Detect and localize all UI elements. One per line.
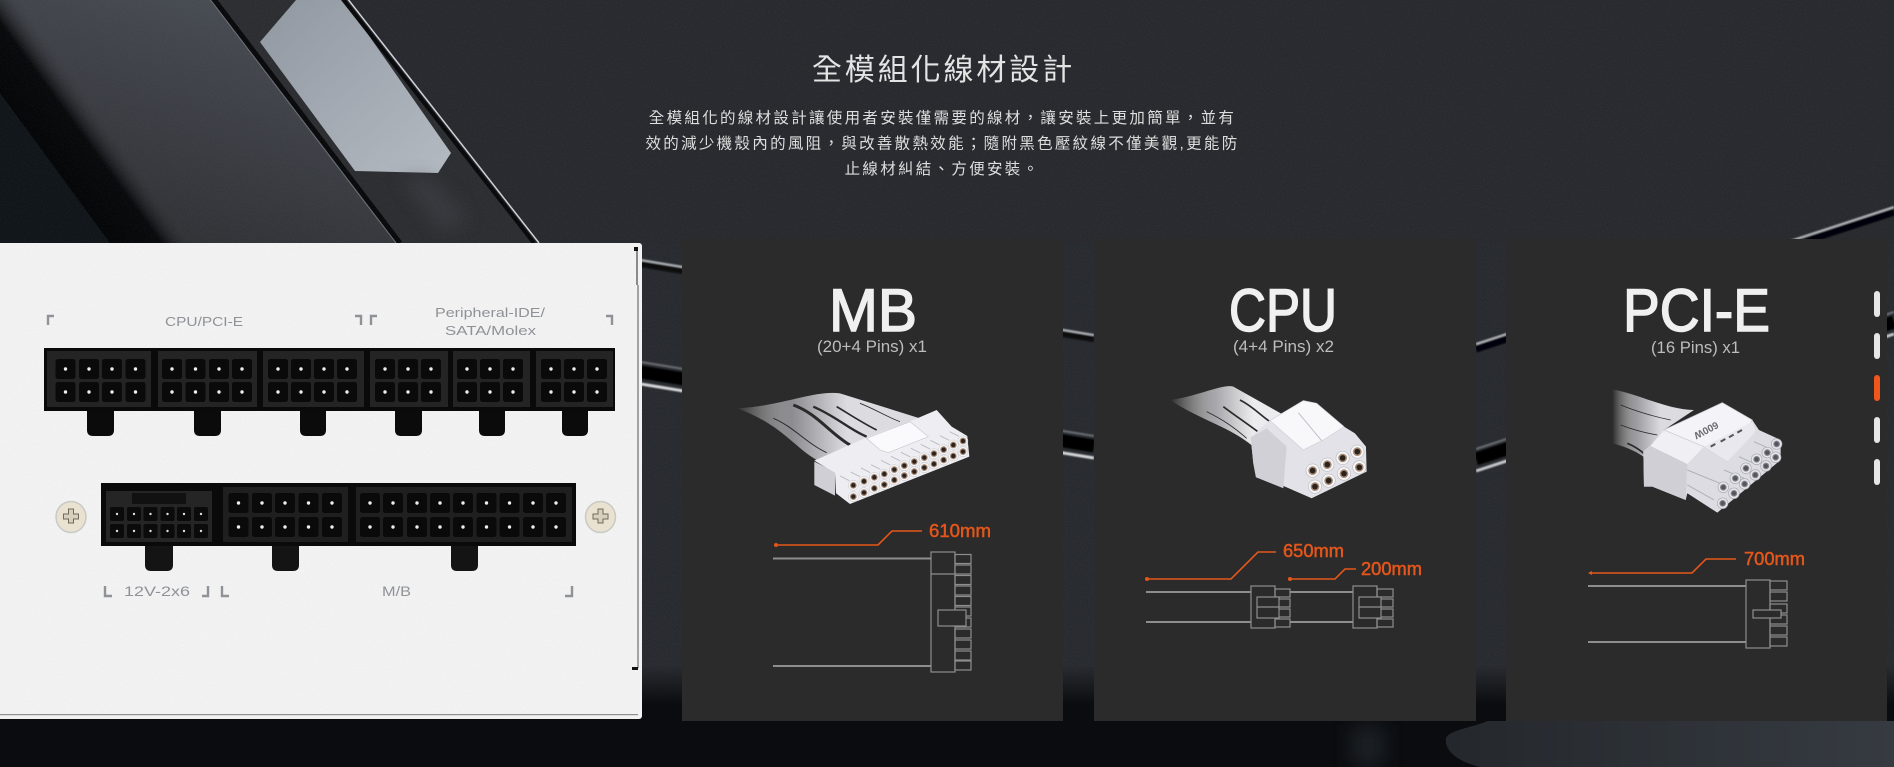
- PCI-E cable diagram: [1588, 580, 1787, 648]
- panel: PCI-E cable: [1506, 239, 1887, 721]
- PCI-E cable length callout: 700mm: 700mm: [1744, 549, 1805, 569]
- label: 12V-2x6: 12V-2x6: [124, 583, 190, 599]
- intro text block: [645, 108, 1240, 178]
- label: CPU/PCI-E: [48, 314, 361, 329]
- MB heading: MB: [829, 277, 917, 344]
- intro text block: 全模組化的線材設計讓使用者安裝僅需要的線材，讓安裝上更加簡單，並有: [649, 108, 1236, 127]
- PCI-E pin count: (16 Pins) x1: [1651, 338, 1740, 357]
- label: M/B: [222, 583, 572, 599]
- MB cable length callout: 610mm: 610mm: [929, 521, 991, 541]
- CPU cable length callouts: 650mm and 200mm: [1145, 541, 1422, 581]
- icon: right screw: [586, 502, 616, 532]
- panel: CPU cable: [1094, 239, 1476, 721]
- label: 12V-2x6: [105, 583, 208, 599]
- intro text block: 效的減少機殼內的風阻，與改善散熱效能；隨附黑色壓紋線不僅美觀,更能防: [645, 134, 1240, 152]
- label: Peripheral-IDE/SATA/Molex: SATA/Molex: [445, 323, 537, 338]
- CPU heading: CPU: [1229, 277, 1337, 344]
- MB pin count: (20+4 Pins) x1: [817, 337, 927, 356]
- PCI-E connector image: 600W: [1691, 419, 1720, 441]
- label: CPU/PCI-E: CPU/PCI-E: [165, 314, 243, 329]
- CPU cable length callouts: 650mm and 200mm: 650mm: [1283, 541, 1344, 561]
- MB cable length callout: 610mm: [774, 521, 991, 547]
- intro text block: 止線材糾結、方便安裝。: [845, 160, 1040, 178]
- background: bottom carbon area: [0, 665, 1894, 767]
- CPU pin count: (4+4 Pins) x2: [1233, 337, 1334, 356]
- connector row: peripheral and CPU/PCI-E sockets: [44, 348, 615, 436]
- pagination indicators: [1874, 291, 1880, 485]
- CPU cable diagram: [1146, 586, 1393, 628]
- label: M/B: M/B: [382, 583, 411, 599]
- CPU connector image: [1170, 386, 1367, 498]
- MB cable diagram: [773, 552, 971, 672]
- CPU cable length callouts: 650mm and 200mm: 200mm: [1361, 559, 1422, 579]
- icon: left screw: [56, 502, 86, 532]
- panel: PSU modular connector plate: [0, 243, 642, 719]
- heading: 全模組化線材設計: [812, 54, 1075, 87]
- connector row: 12V-2x6 and M/B sockets: [101, 483, 576, 571]
- PCI-E connector image: [1612, 389, 1782, 513]
- MB connector image: [737, 393, 969, 504]
- background: light streaks: [641, 207, 1894, 471]
- PCI-E cable length callout: 700mm: [1588, 549, 1805, 575]
- label: Peripheral-IDE/SATA/Molex: [371, 305, 612, 338]
- PCI-E heading: PCI-E: [1623, 277, 1770, 344]
- label: Peripheral-IDE/SATA/Molex: Peripheral-IDE/: [435, 305, 545, 320]
- panel: MB cable: [682, 239, 1063, 721]
